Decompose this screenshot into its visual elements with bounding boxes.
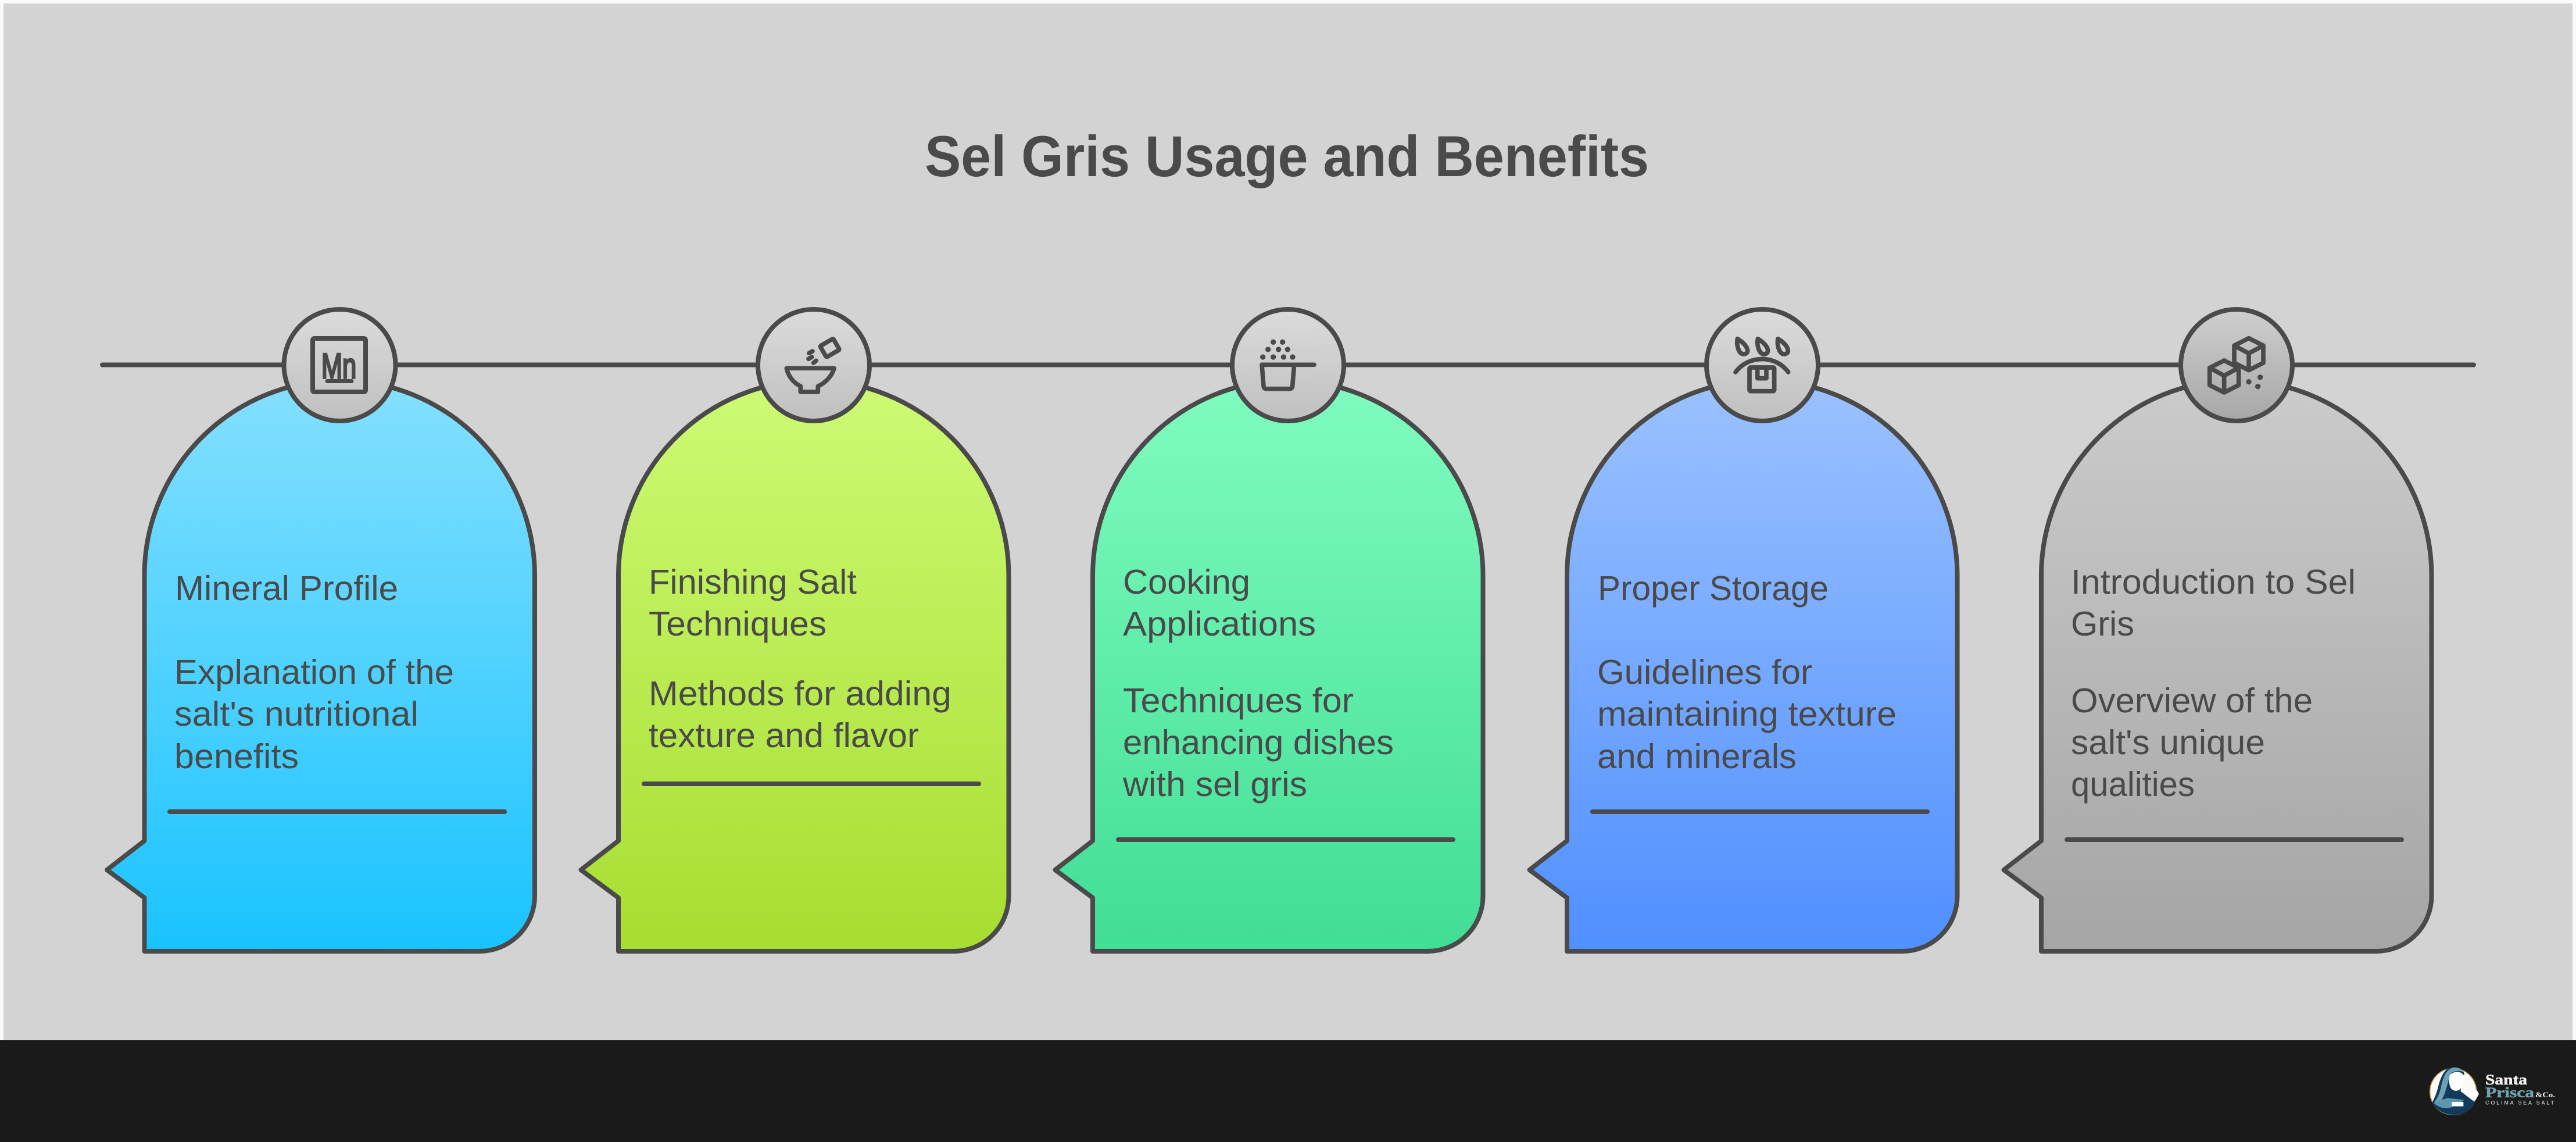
panel: mineral profile — [107, 309, 535, 951]
footer bar — [0, 1040, 2576, 1142]
panel: cooking applications — [1056, 309, 1483, 951]
divider — [2067, 837, 2402, 842]
icon circle — [1232, 309, 1344, 421]
logo wordmark: &Co. — [2535, 1090, 2555, 1099]
title: Sel Gris Usage and Benefits — [925, 124, 1649, 188]
text: mineral description: salt's nutritional — [174, 695, 418, 733]
icon: scoop with salt — [1260, 340, 1314, 389]
card shape: lime — [581, 380, 1009, 951]
panel: finishing salt techniques — [581, 309, 1009, 951]
divider — [1118, 837, 1453, 842]
card shape: blue — [107, 380, 535, 951]
text: finishing description: Methods for adding — [649, 675, 951, 713]
text: cooking description: enhancing dishes — [1123, 723, 1394, 762]
text: introduction description — [2071, 681, 2313, 804]
icon: storage box under cover with drops — [1736, 339, 1788, 391]
heading: cooking applications — [1123, 563, 1316, 643]
icon circle — [2181, 309, 2292, 421]
heading: finishing salt techniques — [649, 563, 857, 643]
card shape: grey — [2004, 380, 2432, 951]
panel: proper storage — [1530, 309, 1958, 951]
icon: Mn element tile: Mn — [321, 347, 356, 386]
text: introduction description: salt's unique — [2071, 723, 2265, 762]
text: storage description: Guidelines for — [1597, 653, 1812, 691]
text: introduction description: Overview of the — [2071, 681, 2313, 720]
heading: introduction to sel gris — [2071, 563, 2356, 643]
text: cooking description — [1122, 681, 1394, 804]
heading: finishing salt techniques: Techniques — [649, 605, 827, 643]
heading: finishing salt techniques: Finishing Salt — [649, 563, 857, 601]
text: introduction description: qualities — [2071, 765, 2195, 804]
text: cooking description: Techniques for — [1123, 681, 1354, 720]
heading: introduction to sel gris: Gris — [2071, 605, 2134, 643]
icon: salt cubes — [2210, 338, 2263, 392]
heading: introduction to sel gris: Introduction to Sel — [2071, 563, 2356, 601]
divider — [644, 781, 979, 786]
divider — [1593, 809, 1927, 814]
logo wordmark: Santa — [2485, 1072, 2528, 1088]
icon: bowl with salt — [786, 338, 839, 392]
text: mineral description: Explanation of the — [174, 653, 454, 691]
icon circle — [1706, 309, 1818, 421]
text: finishing description: texture and flavor — [649, 716, 919, 755]
heading: cooking applications: Cooking — [1123, 563, 1250, 601]
heading: mineral profile: Mineral Profile — [175, 569, 398, 608]
text: storage description: and minerals — [1597, 737, 1797, 776]
logo wordmark — [2485, 1072, 2555, 1106]
logo wordmark: Prisca — [2485, 1085, 2535, 1101]
text: storage description: maintaining texture — [1597, 695, 1897, 733]
text: mineral description: benefits — [174, 737, 299, 776]
text: storage description — [1597, 653, 1897, 776]
text: finishing description — [649, 675, 951, 755]
icon circle — [284, 309, 395, 421]
card shape: green — [1056, 380, 1483, 951]
timeline line — [102, 363, 2474, 367]
text: cooking description: with sel gris — [1122, 765, 1307, 804]
logo wordmark: COLIMA SEA SALT — [2485, 1100, 2554, 1106]
text: mineral description — [174, 653, 454, 776]
logo emblem — [2430, 1067, 2479, 1115]
logo: Santa Prisca & Co. — [2430, 1067, 2555, 1115]
icon: Mn element tile — [313, 338, 366, 392]
icon circle — [758, 309, 870, 421]
divider — [170, 809, 505, 814]
heading: proper storage: Proper Storage — [1598, 569, 1829, 608]
panel: introduction to sel gris — [2004, 309, 2432, 951]
heading: cooking applications: Applications — [1123, 605, 1316, 643]
card shape: blue — [1530, 380, 1958, 951]
